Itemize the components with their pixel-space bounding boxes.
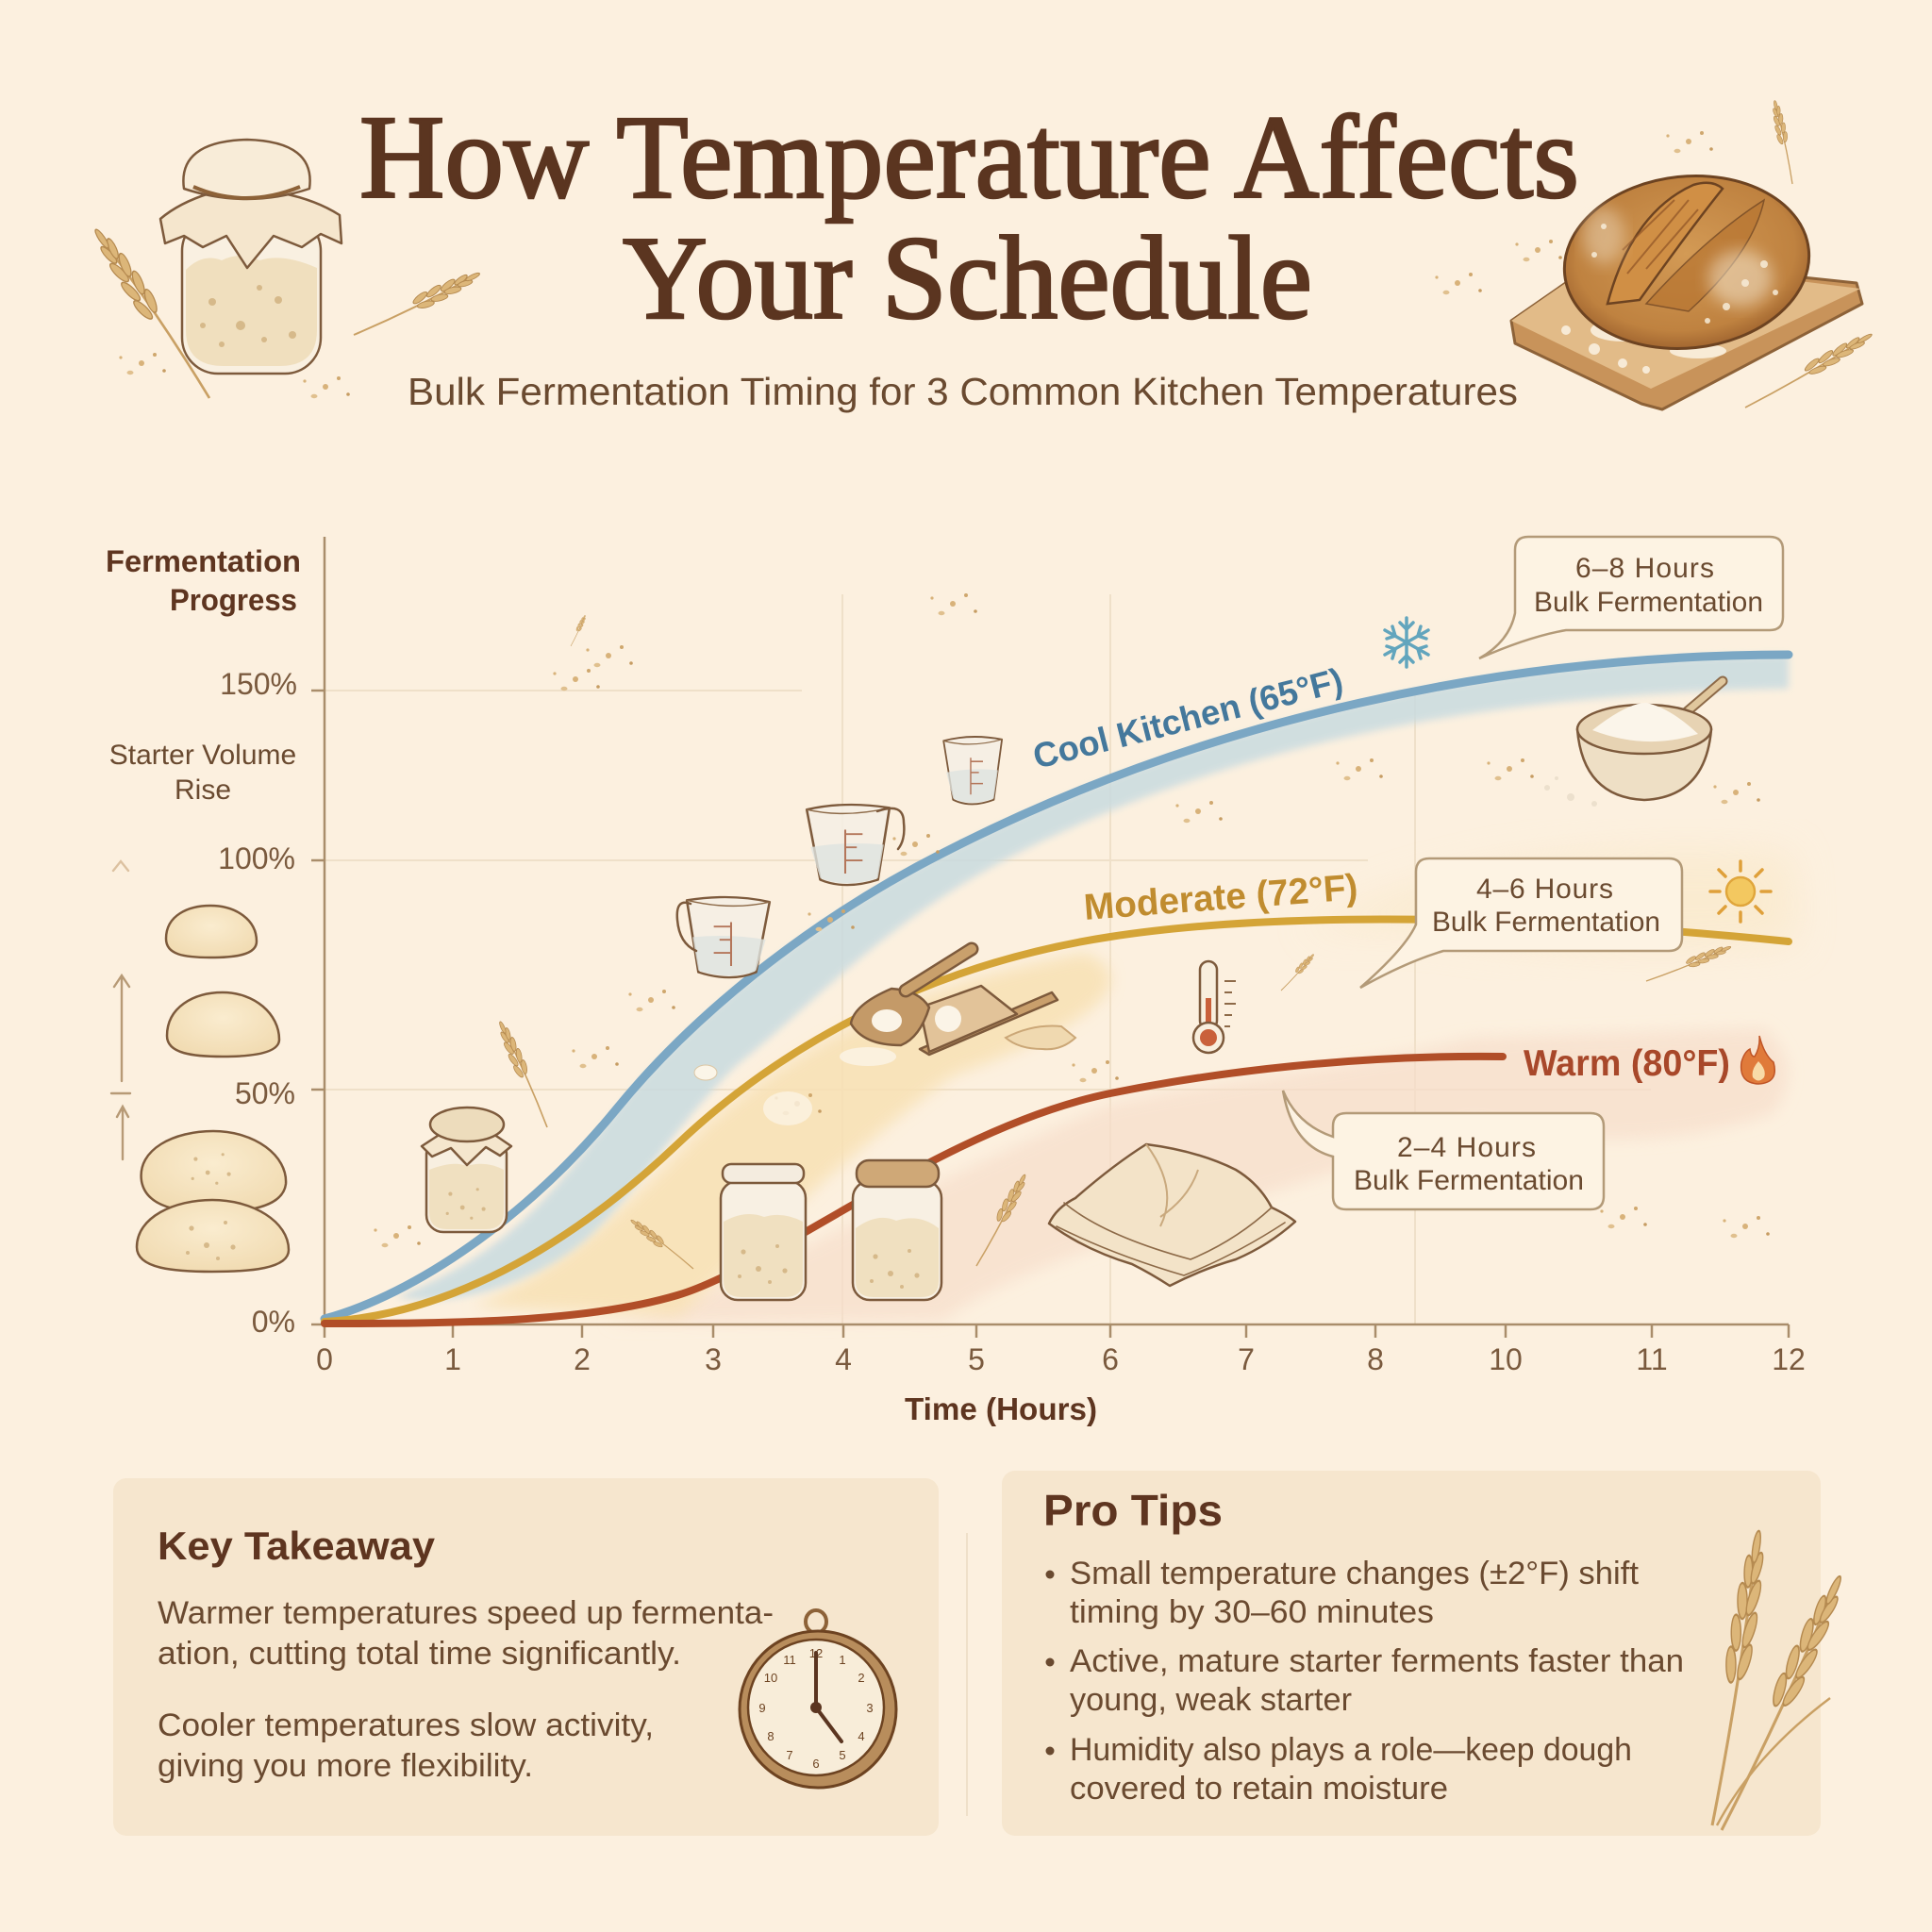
icon: pocket watch: 3 xyxy=(866,1701,874,1715)
rise arrows xyxy=(111,861,130,1159)
dough balls xyxy=(137,906,289,1272)
y axis labels: 50% xyxy=(235,1076,295,1110)
takeaway text: Cooler temperatures slow activity, xyxy=(158,1707,654,1743)
gridlines xyxy=(325,594,1651,1324)
curve label: cool kitchen: Cool Kitchen (65°F) xyxy=(1029,660,1347,776)
takeaway text xyxy=(158,1595,774,1784)
subtitle: Bulk Fermentation Timing for 3 Common Kitchen Temperatures xyxy=(408,370,1518,413)
callout: 2–4 hours: Bulk Fermentation xyxy=(1354,1165,1584,1196)
icon: pocket watch: 5 xyxy=(839,1748,846,1762)
icon: wheat stalks xyxy=(1698,1528,1853,1836)
icon: pocket watch: 4 xyxy=(858,1729,865,1743)
x axis labels: 4 xyxy=(835,1342,852,1376)
x axis labels: 1 xyxy=(444,1342,461,1376)
bullet list xyxy=(1045,1556,1684,1807)
icon: flame xyxy=(1741,1036,1774,1084)
callout: 4–6 hours: 4–6 Hours xyxy=(1476,874,1613,905)
x axis labels: 11 xyxy=(1636,1342,1668,1376)
panel: key takeaway xyxy=(113,1478,939,1836)
x axis labels: 0 xyxy=(316,1342,333,1376)
icon: pocket watch: 2 xyxy=(858,1671,865,1685)
callout: 6–8 hours: 6–8 Hours xyxy=(1575,553,1714,584)
x axis title: Time (Hours) xyxy=(905,1391,1097,1426)
divider xyxy=(966,1533,968,1816)
y axis labels: 0% xyxy=(252,1305,295,1339)
x axis labels: 3 xyxy=(705,1342,722,1376)
panel: pro tips xyxy=(1002,1471,1853,1836)
icon: wheat and grains beside bread xyxy=(1435,99,1875,414)
title: How Temperature Affects xyxy=(359,92,1579,224)
x axis labels: 12 xyxy=(1772,1342,1806,1376)
icon: thermometer xyxy=(1193,961,1236,1053)
colour wash: moderate xyxy=(472,849,1797,1316)
icon: pocket watch: 7 xyxy=(786,1748,793,1762)
curve label: moderate: Moderate (72°F) xyxy=(1082,867,1359,928)
icon: glass jar xyxy=(721,1164,806,1300)
colour wash: warm xyxy=(604,1028,1788,1324)
bullet list: Humidity also plays a role—keep dough xyxy=(1070,1732,1632,1768)
heading: pro tips: Pro Tips xyxy=(1043,1486,1223,1535)
x axis labels: 5 xyxy=(968,1342,985,1376)
curve: warm xyxy=(325,1057,1503,1324)
y axis labels xyxy=(218,667,297,1339)
axes xyxy=(311,537,1789,1338)
y axis title: Fermentation xyxy=(106,544,301,578)
header xyxy=(86,92,1875,414)
icon: pocket watch: 8 xyxy=(767,1729,774,1743)
icon: wheat sprigs in chart xyxy=(493,941,1733,1274)
icon: pocket watch: 6 xyxy=(812,1757,820,1771)
icon: pocket watch: 10 xyxy=(764,1671,777,1685)
starter volume rise label xyxy=(109,740,296,806)
callout: 4–6 hours: Bulk Fermentation xyxy=(1432,907,1660,938)
curve: moderate xyxy=(325,919,1789,1322)
callout: 2–4 hours: 2–4 Hours xyxy=(1397,1132,1536,1163)
icon: folded cloth xyxy=(1049,1144,1295,1286)
title xyxy=(359,92,1579,344)
icon: pocket watch: 12 xyxy=(809,1646,823,1660)
icon: flour scoop and board xyxy=(840,949,1075,1066)
y axis labels: 150% xyxy=(220,667,297,701)
takeaway text: ation, cutting total time significantly. xyxy=(158,1636,681,1672)
starter volume rise label: Rise xyxy=(175,774,231,806)
x axis labels: 10 xyxy=(1489,1342,1523,1376)
icon: measuring cups xyxy=(677,737,1002,977)
y axis title: Progress xyxy=(170,583,297,617)
icon: sourdough loaf on board xyxy=(1511,164,1862,409)
bullet list: timing by 30–60 minutes xyxy=(1070,1594,1434,1630)
icon: starter jar with cloth cover xyxy=(160,140,341,374)
x axis labels: 7 xyxy=(1238,1342,1255,1376)
colour wash: cool xyxy=(396,655,1789,1300)
icon: flour bowl with spoon xyxy=(1487,681,1760,807)
title: Your Schedule xyxy=(623,213,1312,344)
x axis labels xyxy=(316,1342,1806,1376)
takeaway text: Warmer temperatures speed up fermenta- xyxy=(158,1595,774,1631)
x axis labels: 8 xyxy=(1367,1342,1384,1376)
curve: cool kitchen xyxy=(325,655,1789,1319)
bullet list: young, weak starter xyxy=(1070,1682,1352,1718)
scattered grains and flour xyxy=(374,593,1770,1247)
icon: jar with wooden lid xyxy=(853,1160,941,1300)
icon: snowflake xyxy=(1385,618,1428,667)
icon: pocket watch xyxy=(740,1610,896,1788)
x axis labels: 6 xyxy=(1102,1342,1119,1376)
y axis labels: 100% xyxy=(218,841,295,875)
icon: pocket watch: 9 xyxy=(758,1701,766,1715)
icon: wheat beside starter jar xyxy=(86,223,484,405)
icon: pocket watch: 11 xyxy=(783,1653,796,1667)
chart xyxy=(106,537,1806,1426)
takeaway text: giving you more flexibility. xyxy=(158,1748,533,1784)
callout: 6–8 hours xyxy=(1479,537,1783,658)
y axis title xyxy=(106,544,301,617)
icon: pocket watch: 1 xyxy=(839,1653,846,1667)
callout: 4–6 hours xyxy=(1360,858,1682,988)
icon: sun xyxy=(1710,861,1771,922)
heading: key takeaway: Key Takeaway xyxy=(158,1524,436,1568)
bullet list: Active, mature starter ferments faster than xyxy=(1070,1643,1684,1679)
bullet list: Small temperature changes (±2°F) shift xyxy=(1070,1556,1640,1591)
x axis labels: 2 xyxy=(574,1342,591,1376)
bullet list: covered to retain moisture xyxy=(1070,1771,1448,1807)
callout: 6–8 hours: Bulk Fermentation xyxy=(1534,587,1763,618)
starter volume rise label: Starter Volume xyxy=(109,740,296,771)
icon: starter jar with cloth xyxy=(422,1108,511,1232)
callout: 2–4 hours xyxy=(1283,1091,1604,1209)
curve label: warm: Warm (80°F) xyxy=(1524,1043,1730,1084)
